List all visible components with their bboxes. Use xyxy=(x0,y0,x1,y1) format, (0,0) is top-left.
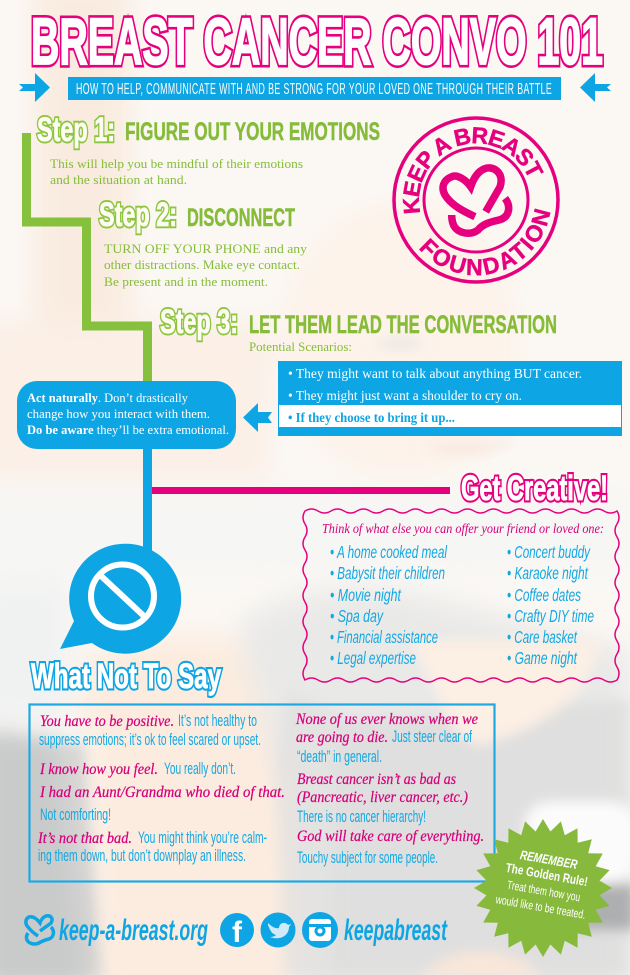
step 2: Step 2: xyxy=(99,196,177,234)
callout: golden rule starburst: would like to be treated. xyxy=(494,892,587,922)
logo: Keep A Breast Foundation: KEEP A BREAST xyxy=(402,127,544,214)
callout: golden rule starburst: Treat them how you xyxy=(506,878,581,904)
panel: get creative list: • Financial assistance xyxy=(330,627,438,647)
panel: what not to say: I had an Aunt/Grandma who died of that. xyxy=(39,784,285,801)
callout: act naturally: change how you interact with them. xyxy=(27,406,210,421)
connector: green steps line xyxy=(26,133,148,384)
icon: no-symbol speech bubble xyxy=(60,544,181,654)
callout: act naturally xyxy=(17,381,236,449)
panel: get creative list: • Legal expertise xyxy=(330,648,416,668)
panel: what not to say: are going to die. xyxy=(296,729,388,746)
step 1: and the situation at hand. xyxy=(50,172,187,187)
panel: what not to say: Breast cancer isn’t as bad as xyxy=(297,771,456,788)
heading: what not to say: What Not To Say xyxy=(31,657,221,696)
panel: potential scenarios: • They might just want a shoulder to cry on. xyxy=(288,389,522,404)
connector: blue line xyxy=(143,445,152,555)
panel: potential scenarios xyxy=(278,361,622,436)
panel: what not to say: Just steer clear of xyxy=(392,728,472,746)
panel: what not to say: (Pancreatic, liver cancer, etc.) xyxy=(297,789,468,806)
panel: what not to say: It’s not healthy to xyxy=(178,712,257,730)
footer: keep-a-breast.org xyxy=(59,914,208,947)
step 2 xyxy=(99,196,308,289)
panel: get creative list: • Concert buddy xyxy=(507,542,591,562)
panel: what not to say: Not comforting! xyxy=(40,806,111,824)
panel: potential scenarios: • They might want to talk about anything BUT cancer. xyxy=(288,367,582,382)
arrow: left banner xyxy=(19,73,50,102)
panel: get creative list: • Spa day xyxy=(330,606,384,626)
step 3: Potential Scenarios: xyxy=(249,340,352,354)
callout: act naturally: Do be aware they’ll be extra emotional. xyxy=(27,422,229,437)
panel: what not to say: I know how you feel. xyxy=(39,761,158,778)
step 3 xyxy=(160,303,557,354)
step 1: FIGURE OUT YOUR EMOTIONS xyxy=(125,118,380,146)
panel: what not to say: God will take care of everything. xyxy=(297,828,484,845)
connector: pink bar xyxy=(152,487,450,494)
logo: Keep A Breast Foundation xyxy=(392,116,560,284)
icon: instagram xyxy=(302,912,338,948)
panel: potential scenarios: • If they choose to bring it up... xyxy=(288,411,455,426)
step 1: This will help you be mindful of their emotions xyxy=(50,156,303,171)
panel: what not to say: You might think you’re calm- xyxy=(138,829,267,847)
panel: what not to say: You really don’t. xyxy=(164,760,236,778)
panel: get creative list: • A home cooked meal xyxy=(330,542,448,562)
callout: golden rule starburst xyxy=(474,819,612,957)
step 2: TURN OFF YOUR PHONE and any xyxy=(104,241,308,256)
icon: footer heart xyxy=(26,916,53,944)
panel: what not to say: None of us ever knows when we xyxy=(295,711,478,728)
panel: what not to say: You have to be positive. xyxy=(40,713,174,730)
icon: logo heart xyxy=(443,168,509,233)
subtitle banner: HOW TO HELP, COMMUNICATE WITH AND BE STRONG FOR YOUR LOVED ONE THROUGH THEIR BATTLE xyxy=(76,79,552,98)
step 3: Step 3: xyxy=(160,303,238,341)
step 2: Be present and in the moment. xyxy=(104,274,268,289)
step 2: Step 2: xyxy=(99,196,177,234)
panel: get creative list: • Care basket xyxy=(507,627,578,647)
step 1 xyxy=(37,111,380,187)
icon: twitter xyxy=(260,912,296,948)
panel: get creative list: • Coffee dates xyxy=(507,585,581,605)
panel: what not to say: “death” in general. xyxy=(297,748,382,766)
step 1: Step 1: xyxy=(37,111,115,149)
callout: golden rule starburst: The Golden Rule! xyxy=(505,860,589,889)
step 2: other distractions. Make eye contact. xyxy=(104,257,300,272)
heading: what not to say xyxy=(31,657,221,696)
step 2: DISCONNECT xyxy=(187,204,295,232)
icon: facebook xyxy=(220,913,254,949)
icon: facebook: f xyxy=(232,916,243,949)
panel: what not to say: It’s not that bad. xyxy=(37,830,132,847)
logo: Keep A Breast Foundation: FOUNDATION xyxy=(419,208,550,276)
footer xyxy=(26,912,448,949)
panel: what not to say: ing them down, but don’t downplay an illness. xyxy=(38,847,246,865)
panel: get creative list: • Movie night xyxy=(330,585,402,605)
panel: get creative list: • Game night xyxy=(507,648,578,668)
panel: get creative list: • Babysit their children xyxy=(330,563,445,583)
footer: keepabreast xyxy=(344,914,448,947)
panel: what not to say: suppress emotions; it’s ok to feel scared or upset. xyxy=(39,731,261,749)
callout: act naturally: Act naturally. Don’t drastically xyxy=(27,390,188,405)
panel: what not to say: There is no cancer hierarchy! xyxy=(297,808,426,826)
arrow: to act naturally box xyxy=(243,403,272,432)
step 1: Step 1: xyxy=(37,111,115,149)
panel: what not to say: Touchy subject for some people. xyxy=(297,849,438,867)
callout: golden rule starburst: REMEMBER xyxy=(519,847,579,872)
step 3: Step 3: xyxy=(160,303,238,341)
heading: what not to say: What Not To Say xyxy=(31,657,221,696)
panel: get creative list xyxy=(303,509,619,682)
panel: what not to say xyxy=(30,704,494,882)
panel: get creative list: • Karaoke night xyxy=(507,563,589,583)
arrow: right banner xyxy=(580,73,611,102)
